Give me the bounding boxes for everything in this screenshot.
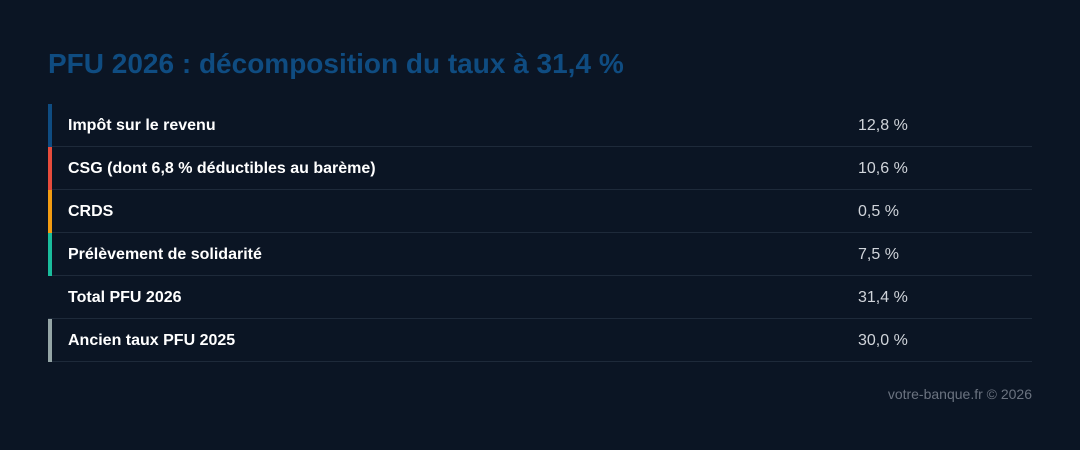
row: total: Total PFU 2026 bbox=[68, 289, 182, 306]
row: impot bbox=[48, 104, 1032, 147]
row: crds: CRDS bbox=[68, 203, 113, 220]
row: solidarite: Prélèvement de solidarité bbox=[68, 246, 262, 263]
table bbox=[48, 104, 1032, 362]
row: total bbox=[48, 276, 1032, 319]
row: csg bbox=[48, 147, 1032, 190]
row: ancien: Ancien taux PFU 2025 bbox=[68, 332, 235, 349]
row: ancien bbox=[48, 319, 1032, 362]
row: csg: CSG (dont 6,8 % déductibles au barème) bbox=[68, 160, 376, 177]
row: impot: Impôt sur le revenu bbox=[68, 117, 216, 134]
row: solidarite bbox=[48, 233, 1032, 276]
row: ancien: 30,0 % bbox=[858, 332, 908, 349]
row: crds bbox=[48, 190, 1032, 233]
row: solidarite: 7,5 % bbox=[858, 246, 899, 263]
footer: votre-banque.fr © 2026 bbox=[888, 386, 1032, 402]
row: impot: 12,8 % bbox=[858, 117, 908, 134]
row: crds: 0,5 % bbox=[858, 203, 899, 220]
title: PFU 2026 : décomposition du taux à 31,4 % bbox=[48, 48, 624, 79]
row: total: 31,4 % bbox=[858, 289, 908, 306]
row: csg: 10,6 % bbox=[858, 160, 908, 177]
